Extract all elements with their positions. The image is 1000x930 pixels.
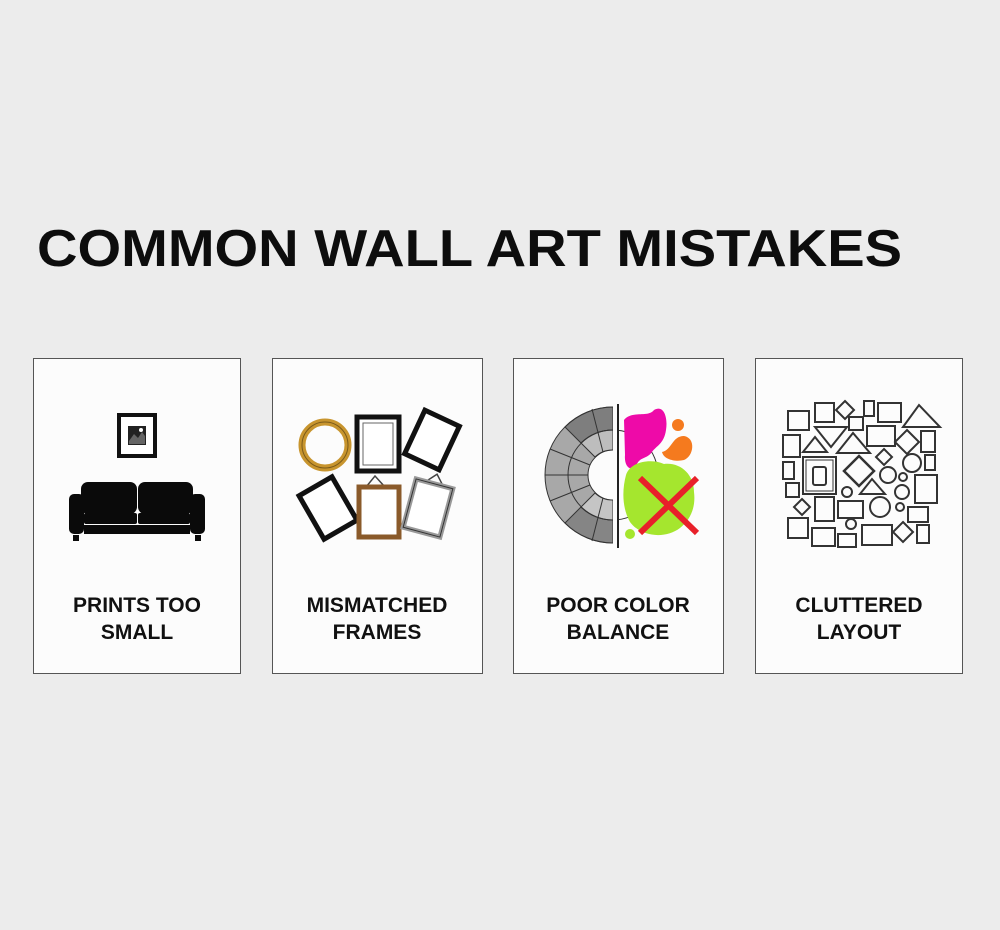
panel: mismatched frames: FRAMES [333,621,421,644]
icon: assorted frames [299,410,459,539]
panel: cluttered layout [756,358,962,674]
divider line [617,404,619,548]
panel: poor color balance [514,358,724,674]
label: POOR COLOR [546,594,690,617]
panel: poor color balance: BALANCE [567,621,669,644]
icon: colour splashes [623,409,697,539]
panel: prints too small [34,358,240,674]
icon: small framed print [119,415,155,456]
title: COMMON WALL ART MISTAKES [37,220,902,278]
icon: grey half color wheel [545,407,658,543]
panel: mismatched frames [272,358,482,674]
icon: sofa [69,482,205,541]
label: PRINTS TOO [73,594,201,617]
panel: cluttered layout: LAYOUT [817,621,901,644]
panel: prints too small: SMALL [101,621,173,644]
label: CLUTTERED [795,594,923,617]
icon: cluttered shapes [783,401,940,547]
label: MISMATCHED [307,594,447,617]
